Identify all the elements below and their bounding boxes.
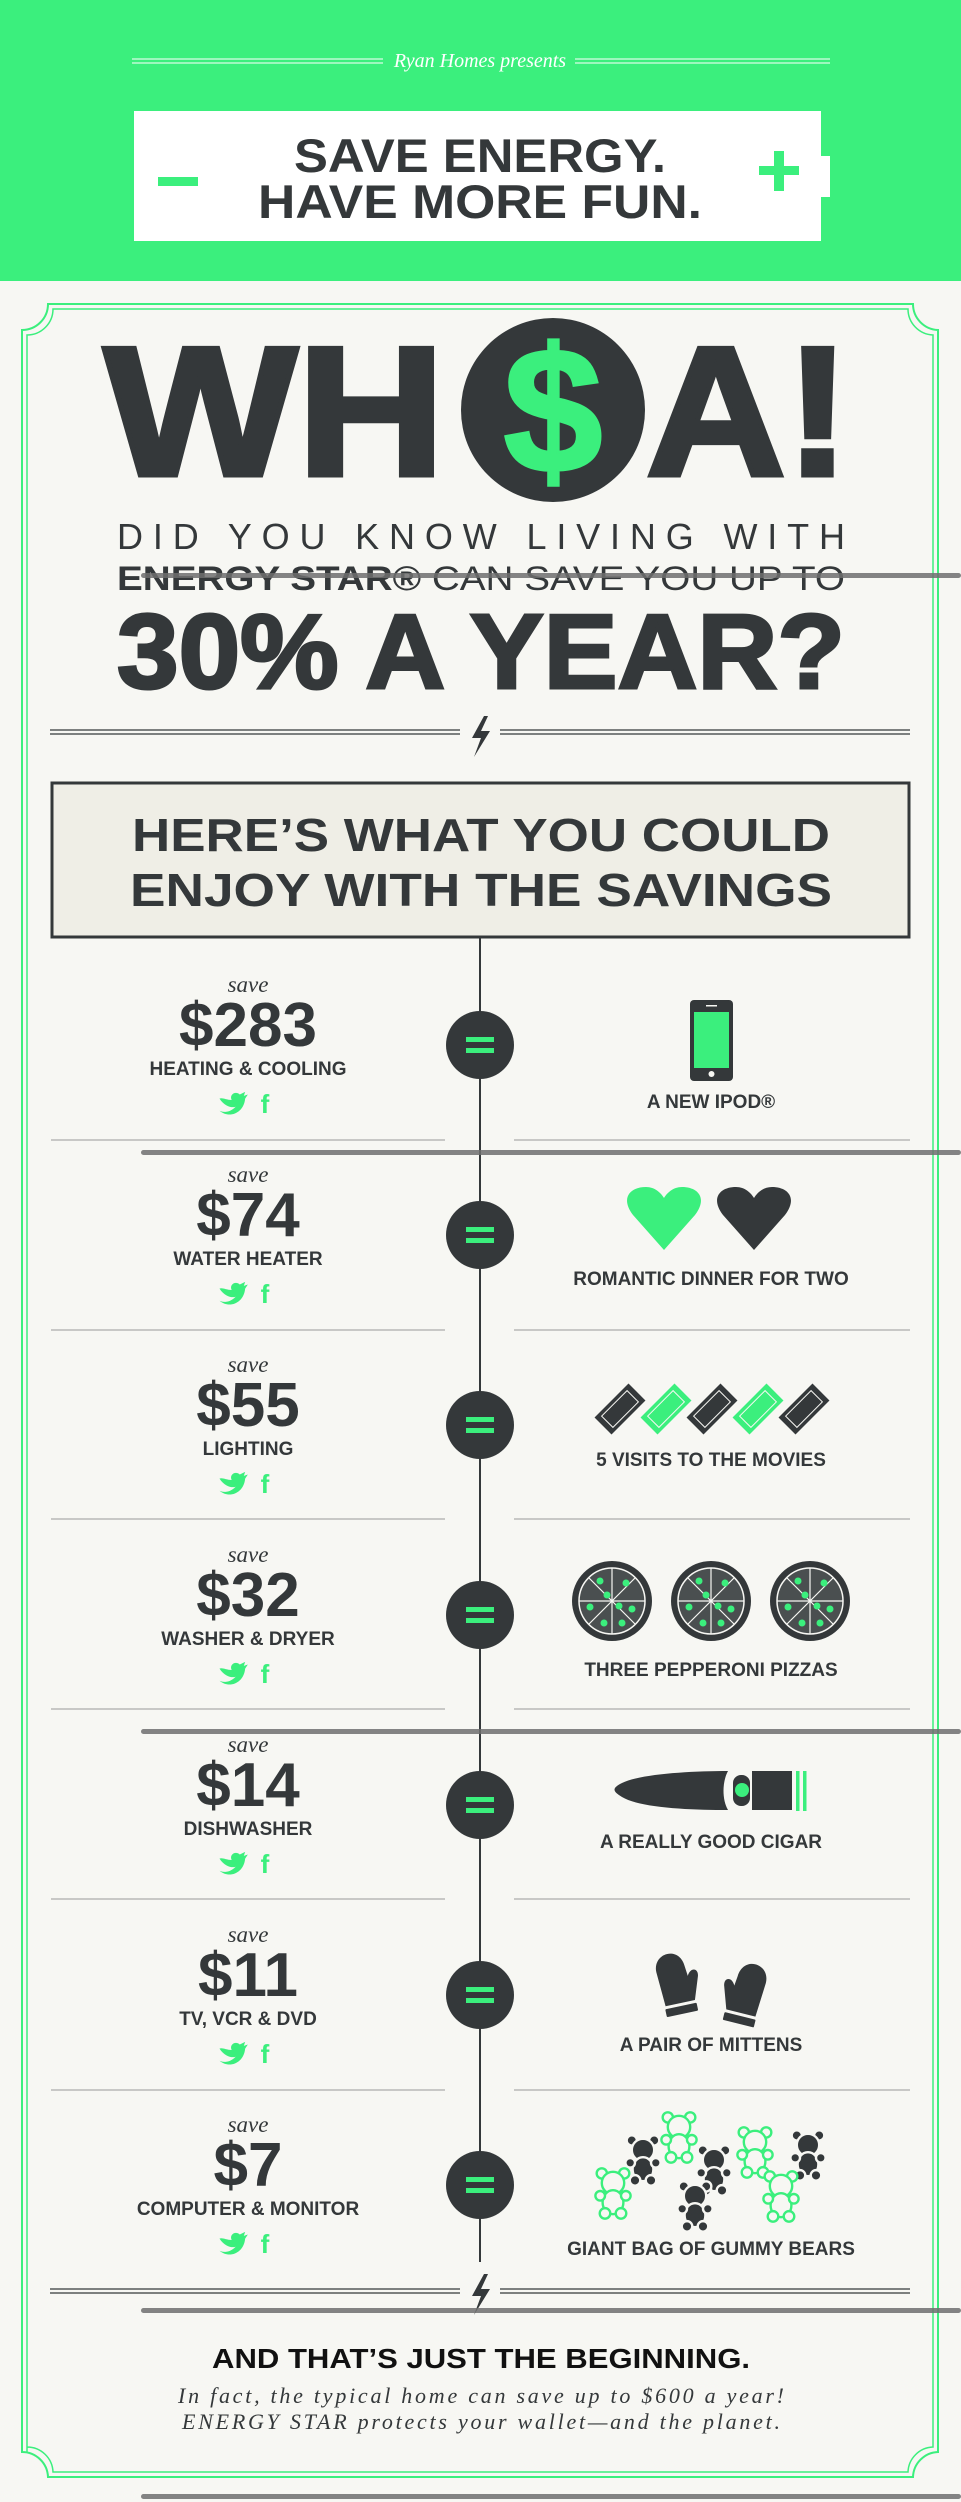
- row 4: washer & dryer: save: [228, 1542, 268, 1567]
- row 1: heating & cooling: f: [261, 1089, 270, 1119]
- row 3: lighting: LIGHTING: [203, 1439, 293, 1460]
- closing text: In fact, the typical home can save up to $600 a year!: [177, 2383, 784, 2408]
- row 4: washer & dryer: f: [261, 1659, 270, 1689]
- divider with bolt: [50, 716, 910, 757]
- subtitle question: [117, 516, 845, 711]
- icon: gummy bears: [595, 2112, 826, 2232]
- row 3: lighting: f: [261, 1469, 270, 1499]
- icon: tickets: [595, 1384, 829, 1434]
- row 7: computer & monitor: $7: [214, 2131, 282, 2200]
- heading box: ENJOY WITH THE SAVINGS: [130, 864, 832, 916]
- icon: pizzas: [572, 1561, 850, 1641]
- icon: cigar: [614, 1771, 806, 1811]
- closing text: ENERGY STAR protects your wallet—and the planet.: [181, 2409, 780, 2434]
- row 2: water heater: WATER HEATER: [173, 1249, 323, 1270]
- row 5: dishwasher: f: [261, 1849, 270, 1879]
- header band: [0, 0, 961, 281]
- row 5: dishwasher: DISHWASHER: [184, 1819, 313, 1840]
- row 2: water heater: [173, 1162, 849, 1309]
- row 3: lighting: $55: [196, 1371, 300, 1440]
- icon: phone: [690, 1000, 733, 1081]
- row 4: washer & dryer: THREE PEPPERONI PIZZAS: [584, 1660, 838, 1681]
- title WHOA: A!: [646, 308, 850, 514]
- row 6: tv vcr dvd: TV, VCR & DVD: [179, 2009, 317, 2030]
- row 7: computer & monitor: f: [261, 2229, 270, 2259]
- row 4: washer & dryer: [161, 1542, 850, 1689]
- row 7: computer & monitor: [137, 2112, 855, 2260]
- row 7: computer & monitor: save: [228, 2112, 268, 2137]
- row 5: dishwasher: save: [228, 1732, 268, 1757]
- title WHOA: WH: [104, 308, 445, 514]
- icon: dollar circle: $: [504, 311, 602, 510]
- row separators: [51, 1140, 910, 2090]
- battery tagline box: SAVE ENERGY.: [294, 129, 666, 182]
- closing text: AND THAT’S JUST THE BEGINNING.: [212, 2343, 750, 2374]
- row 3: lighting: 5 VISITS TO THE MOVIES: [596, 1450, 826, 1471]
- row 2: water heater: ROMANTIC DINNER FOR TWO: [573, 1269, 849, 1290]
- row 1: heating & cooling: A NEW IPOD®: [647, 1092, 775, 1113]
- row 4: washer & dryer: $32: [196, 1561, 300, 1630]
- battery tagline box: [134, 111, 830, 241]
- heading box: HERE’S WHAT YOU COULD: [132, 809, 830, 861]
- row 5: dishwasher: A REALLY GOOD CIGAR: [600, 1832, 822, 1853]
- title WHOA: [104, 308, 850, 514]
- row 6: tv vcr dvd: [179, 1922, 802, 2069]
- row 1: heating & cooling: HEATING & COOLING: [149, 1059, 347, 1080]
- heading box: [52, 783, 909, 937]
- row 1: heating & cooling: [149, 972, 775, 1119]
- row 6: tv vcr dvd: save: [228, 1922, 268, 1947]
- row 2: water heater: save: [228, 1162, 268, 1187]
- subtitle question: DID YOU KNOW LIVING WITH: [117, 516, 845, 557]
- row 7: computer & monitor: COMPUTER & MONITOR: [137, 2199, 359, 2220]
- overlay grey bars: [141, 573, 961, 2499]
- battery tagline box: HAVE MORE FUN.: [258, 175, 702, 228]
- row 5: dishwasher: $14: [196, 1751, 300, 1820]
- row 1: heating & cooling: $283: [179, 991, 317, 1060]
- row 6: tv vcr dvd: A PAIR OF MITTENS: [620, 2035, 802, 2056]
- closing text: [177, 2343, 784, 2434]
- row 5: dishwasher: [184, 1732, 822, 1879]
- row 1: heating & cooling: save: [228, 972, 268, 997]
- row 3: lighting: save: [228, 1352, 268, 1377]
- subtitle question: ENERGY STAR® CAN SAVE YOU UP TO: [117, 560, 845, 598]
- subtitle question: 30% A YEAR?: [117, 593, 845, 711]
- row 2: water heater: f: [261, 1279, 270, 1309]
- row 3: lighting: [196, 1352, 829, 1499]
- bottom divider with bolt: [50, 2274, 910, 2315]
- icon: dollar circle: [461, 311, 645, 510]
- icon: mittens: [653, 1949, 770, 2028]
- row 6: tv vcr dvd: f: [261, 2039, 270, 2069]
- row 4: washer & dryer: WASHER & DRYER: [161, 1629, 335, 1650]
- byline: Ryan Homes presents: [393, 50, 566, 72]
- icon: hearts: [627, 1187, 791, 1250]
- row 7: computer & monitor: GIANT BAG OF GUMMY BEARS: [567, 2239, 855, 2260]
- row 2: water heater: $74: [196, 1181, 300, 1250]
- row 6: tv vcr dvd: $11: [198, 1941, 298, 2010]
- timeline line: [479, 937, 481, 2262]
